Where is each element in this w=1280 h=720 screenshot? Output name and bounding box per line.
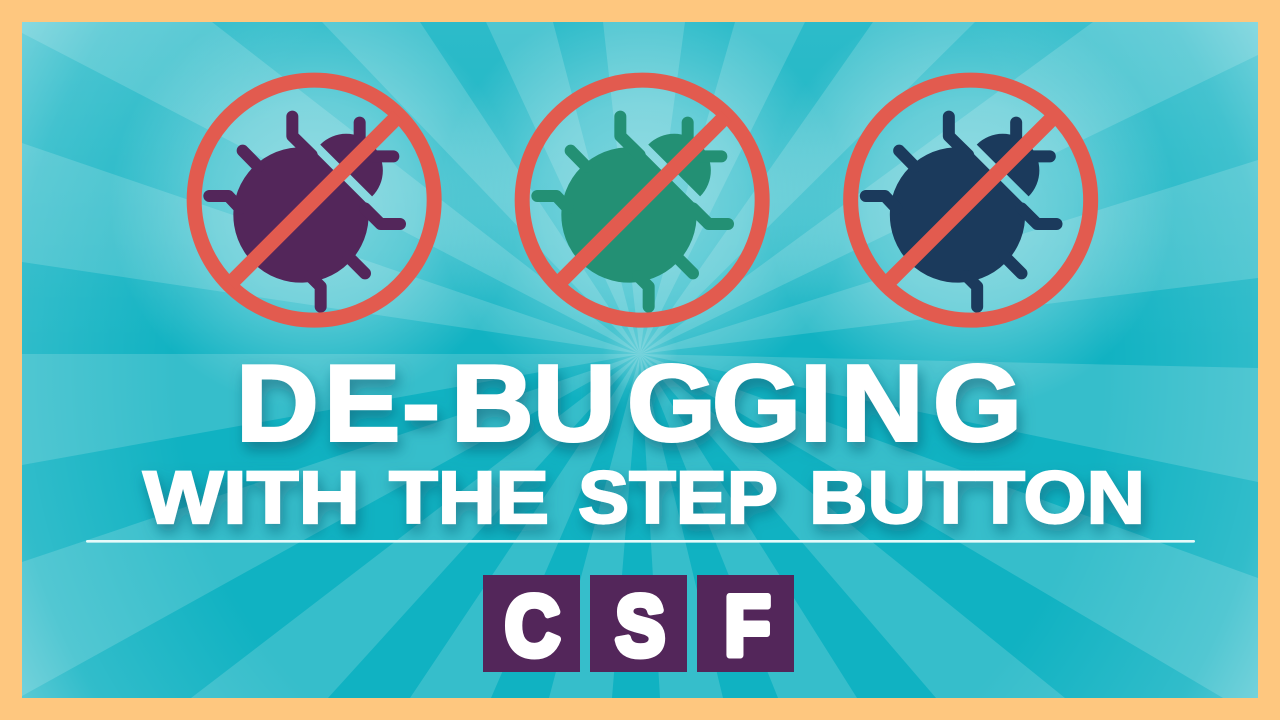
icon: prohibited navy bug [851, 80, 1091, 320]
logo tile F [697, 575, 794, 674]
divider line [86, 540, 1195, 543]
prohibition sign [522, 80, 762, 320]
navy bug [866, 117, 1056, 307]
title: DE-BUGGING [236, 342, 1022, 464]
logo: CSF [483, 575, 794, 674]
subtitle [143, 456, 1145, 539]
icon: prohibited green bug [522, 80, 762, 320]
subtitle: WITH [143, 456, 360, 539]
logo tile F: F [724, 579, 770, 674]
subtitle: THE [389, 456, 549, 539]
subtitle: STEP [578, 456, 778, 539]
prohibition sign [851, 80, 1091, 320]
logo tile C: C [505, 579, 560, 674]
logo tile C [483, 575, 580, 674]
green bug [537, 117, 728, 307]
prohibition sign [194, 80, 434, 320]
purple bug [209, 117, 400, 307]
icon: prohibited purple bug [194, 80, 434, 320]
logo tile S: S [616, 579, 665, 674]
logo tile S [590, 575, 687, 674]
subtitle: BUTTON [809, 456, 1145, 539]
